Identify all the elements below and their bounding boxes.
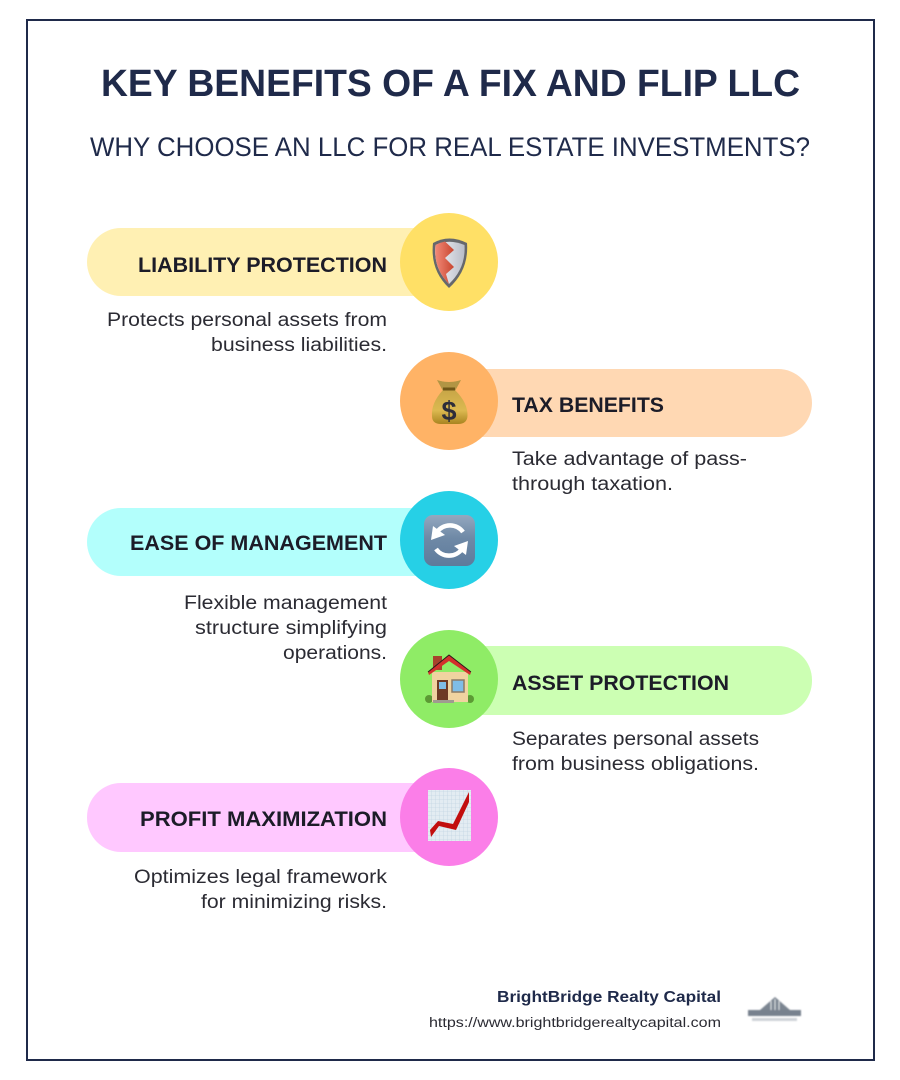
description: profit maximization: Optimizes legal framework — [134, 867, 388, 888]
description: asset protection: from business obligations. — [512, 754, 759, 775]
title: KEY BENEFITS OF A FIX AND FLIP LLC — [101, 63, 800, 105]
description: ease of management: operations. — [283, 643, 387, 664]
icon: shield — [433, 238, 467, 288]
pill: asset protection — [432, 646, 812, 715]
pill: tax benefits — [432, 369, 812, 437]
heading: ease of management: EASE OF MANAGEMENT — [130, 532, 387, 555]
icon: money bag — [432, 380, 468, 426]
pill: ease of management — [87, 508, 467, 576]
description: asset protection: Separates personal assets — [512, 729, 759, 750]
description: asset protection — [512, 729, 759, 775]
description: tax benefits — [512, 449, 747, 495]
circle: tax benefits — [400, 352, 498, 450]
circle: liability protection — [400, 213, 498, 311]
description: ease of management: structure simplifying — [195, 618, 387, 639]
description: profit maximization: for minimizing risks. — [201, 892, 387, 913]
panel: tax benefits — [400, 352, 812, 495]
icon: chart rising — [428, 790, 471, 841]
icon: refresh arrows — [424, 515, 475, 566]
footer url: https://www.brightbridgerealtycapital.com — [429, 1015, 721, 1030]
heading: profit maximization: PROFIT MAXIMIZATION — [140, 808, 387, 831]
description: liability protection: Protects personal assets from — [107, 310, 387, 331]
icon: house — [425, 655, 474, 703]
description: liability protection — [107, 310, 387, 356]
circle: asset protection — [400, 630, 498, 728]
icon: company logo — [748, 997, 801, 1021]
description: liability protection: business liabilities. — [211, 335, 387, 356]
heading: tax benefits: TAX BENEFITS — [512, 394, 664, 417]
pill: profit maximization — [87, 783, 467, 852]
description: ease of management: Flexible management — [184, 593, 388, 614]
icon: money bag: $ — [441, 396, 457, 426]
heading: liability protection: LIABILITY PROTECTION — [138, 254, 387, 277]
panel: liability protection — [87, 213, 498, 356]
panel: asset protection — [400, 630, 812, 775]
panel: profit maximization — [87, 768, 498, 913]
circle: profit maximization — [400, 768, 498, 866]
description: tax benefits: through taxation. — [512, 474, 673, 495]
panel: ease of management — [87, 491, 498, 664]
description: profit maximization — [134, 867, 388, 913]
subtitle: WHY CHOOSE AN LLC FOR REAL ESTATE INVESTMENTS? — [90, 132, 810, 162]
pill: liability protection — [87, 228, 467, 296]
footer company name: BrightBridge Realty Capital — [497, 989, 721, 1006]
circle: ease of management — [400, 491, 498, 589]
description: tax benefits: Take advantage of pass- — [512, 449, 747, 470]
heading: asset protection: ASSET PROTECTION — [512, 672, 729, 695]
description: ease of management — [184, 593, 388, 664]
